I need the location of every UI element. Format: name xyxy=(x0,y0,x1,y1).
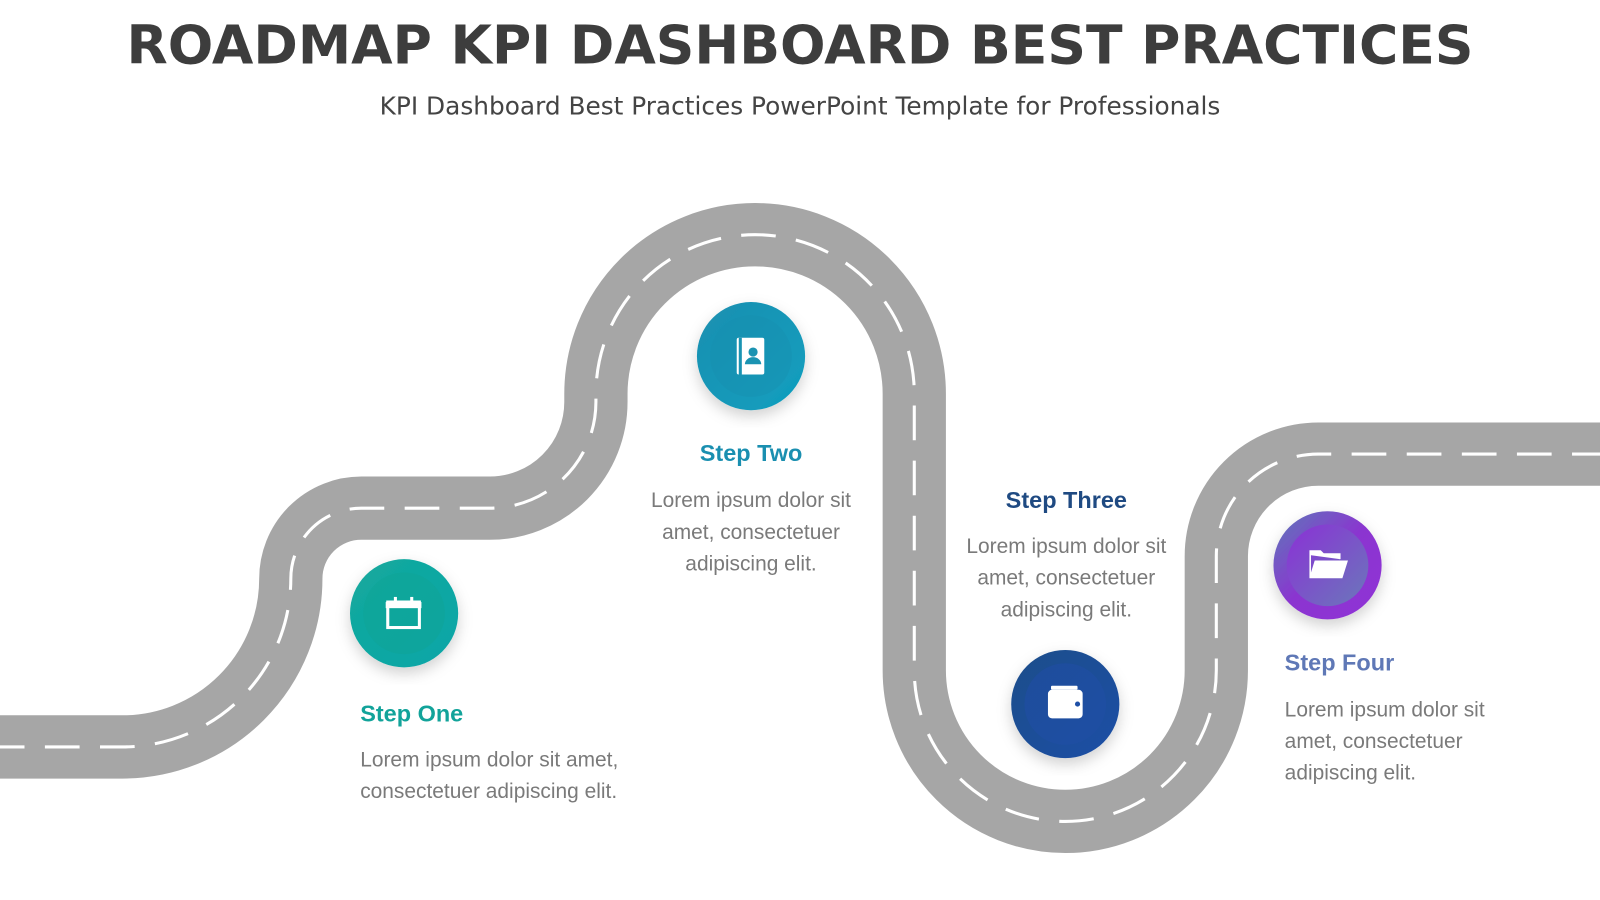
text: amet, consectetuer xyxy=(1285,730,1463,753)
text: consectetuer adipiscing elit. xyxy=(360,780,617,803)
text: Lorem ipsum dolor sit xyxy=(966,535,1166,558)
step four text xyxy=(1285,649,1485,785)
text: Lorem ipsum dolor sit amet, xyxy=(360,748,618,771)
step three text xyxy=(966,487,1166,621)
text: adipiscing elit. xyxy=(685,552,817,576)
text: Lorem ipsum dolor sit xyxy=(651,489,851,512)
text: adipiscing elit. xyxy=(1285,761,1416,785)
text: Step One xyxy=(360,700,463,727)
subtitle: KPI Dashboard Best Practices PowerPoint Template for Professionals xyxy=(380,91,1220,120)
text: Lorem ipsum dolor sit xyxy=(1285,698,1485,721)
text: Step Three xyxy=(1006,487,1127,513)
text: amet, consectetuer xyxy=(662,520,840,544)
title: ROADMAP KPI DASHBOARD BEST PRACTICES xyxy=(127,14,1473,77)
step two icon xyxy=(691,302,811,422)
text: adipiscing elit. xyxy=(1001,598,1132,621)
step one icon xyxy=(344,559,464,679)
text: Step Four xyxy=(1285,649,1394,676)
step one text xyxy=(360,700,618,803)
step two text xyxy=(651,440,851,576)
text: amet, consectetuer xyxy=(977,566,1155,590)
step three icon xyxy=(1006,650,1125,770)
step four icon xyxy=(1268,511,1388,632)
text: Step Two xyxy=(700,440,802,466)
